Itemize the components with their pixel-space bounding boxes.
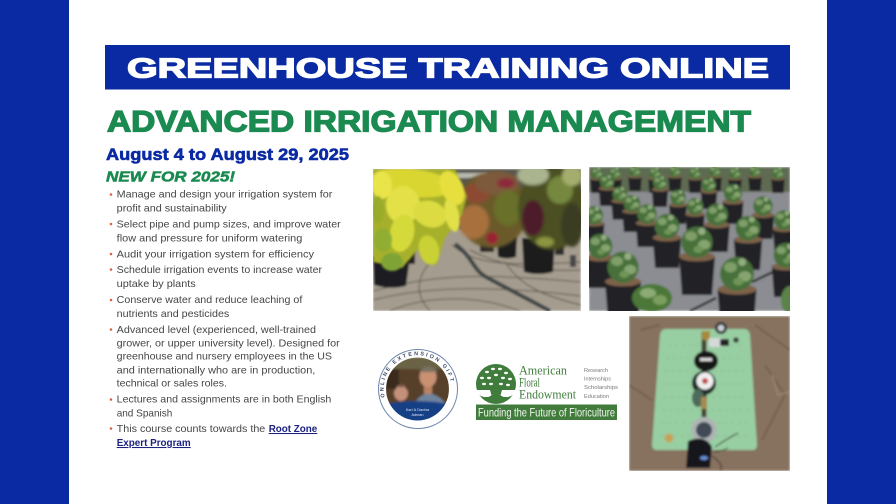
bullet: advanced level: technical or sales roles. (117, 379, 227, 390)
bullet: advanced level (110, 325, 340, 390)
bullet: lectures: and Spanish (117, 408, 173, 419)
logo: american floral endowment: Funding the Future of Floriculture (478, 405, 615, 419)
bullet: audit: Audit your irrigation system for efficiency (117, 249, 315, 260)
bullet: pipe and pump: Select pipe and pump sizes, and improve water (117, 219, 341, 230)
bullet: advanced level: greenhouse and nursery employees in the US (117, 352, 332, 363)
bullet: lectures: Lectures and assignments are in both English (117, 395, 332, 406)
bullet: advanced level: grower, or upper university level). Designed for (117, 338, 340, 349)
logo wordmark: Floral (519, 376, 540, 390)
bullet: manage and design: profit and sustainability (117, 204, 228, 215)
logo side list: Scholarships (584, 385, 618, 391)
bullet: schedule: uptake by plants (117, 279, 196, 290)
bullet: advanced level: and internationally who are in production, (117, 365, 315, 376)
photo: irrigation meter assembly on green lid (629, 316, 790, 471)
bullet: manage and design (110, 190, 333, 215)
bullet: root zone expert program link (110, 424, 317, 449)
badge: online extension gift: Adman (411, 413, 424, 417)
bullet: lectures (110, 395, 332, 419)
bullet: pipe and pump: flow and pressure for uniform watering (117, 233, 303, 244)
photo: coleus plants with drip line (369, 165, 586, 311)
bullet: root zone expert program link: Root Zone (269, 424, 317, 435)
heading: course name: ADVANCED IRRIGATION MANAGEMENT (107, 106, 751, 139)
logo tree icon (476, 364, 516, 404)
logo side list: Research (584, 368, 608, 374)
bullet: advanced level: Advanced level (experienced, well-trained (117, 325, 316, 336)
bullet: pipe and pump (110, 219, 341, 244)
badge caption: Kari & Davina (406, 408, 430, 412)
course dates: August 4 to August 29, 2025 (106, 146, 349, 164)
logo side list: Education (584, 394, 609, 400)
logo wordmark: Endowment (519, 388, 576, 402)
logo wordmark: American (519, 364, 568, 378)
badge portrait (386, 358, 449, 420)
logo: american floral endowment (476, 364, 618, 420)
badge ring text: ONLINE EXTENSION GIFT (380, 352, 454, 398)
bullet: schedule (110, 265, 323, 290)
bullet: manage and design: Manage and design your irrigation system for (117, 190, 333, 201)
bullet list (110, 190, 341, 449)
title banner (105, 45, 790, 90)
logo side list: Internships (584, 376, 611, 382)
photo: potted shrubs in rows (589, 167, 790, 311)
title banner: GREENHOUSE TRAINING ONLINE (127, 52, 769, 83)
new for 2025 label: NEW FOR 2025! (106, 168, 235, 186)
badge: online extension gift (378, 349, 458, 429)
bullet: conserve water (110, 295, 302, 320)
bullet: root zone expert program link: Expert Program (117, 438, 191, 449)
logo tagline bar (476, 404, 617, 420)
logo side list (584, 368, 618, 400)
bullet: conserve water: nutrients and pesticides (117, 309, 229, 320)
logo wordmark (519, 364, 576, 402)
bullet: conserve water: Conserve water and reduce leaching of (117, 295, 302, 306)
bullet: schedule: Schedule irrigation events to increase water (117, 265, 323, 276)
bullet: root zone expert program link: This course counts towards the (117, 424, 266, 435)
